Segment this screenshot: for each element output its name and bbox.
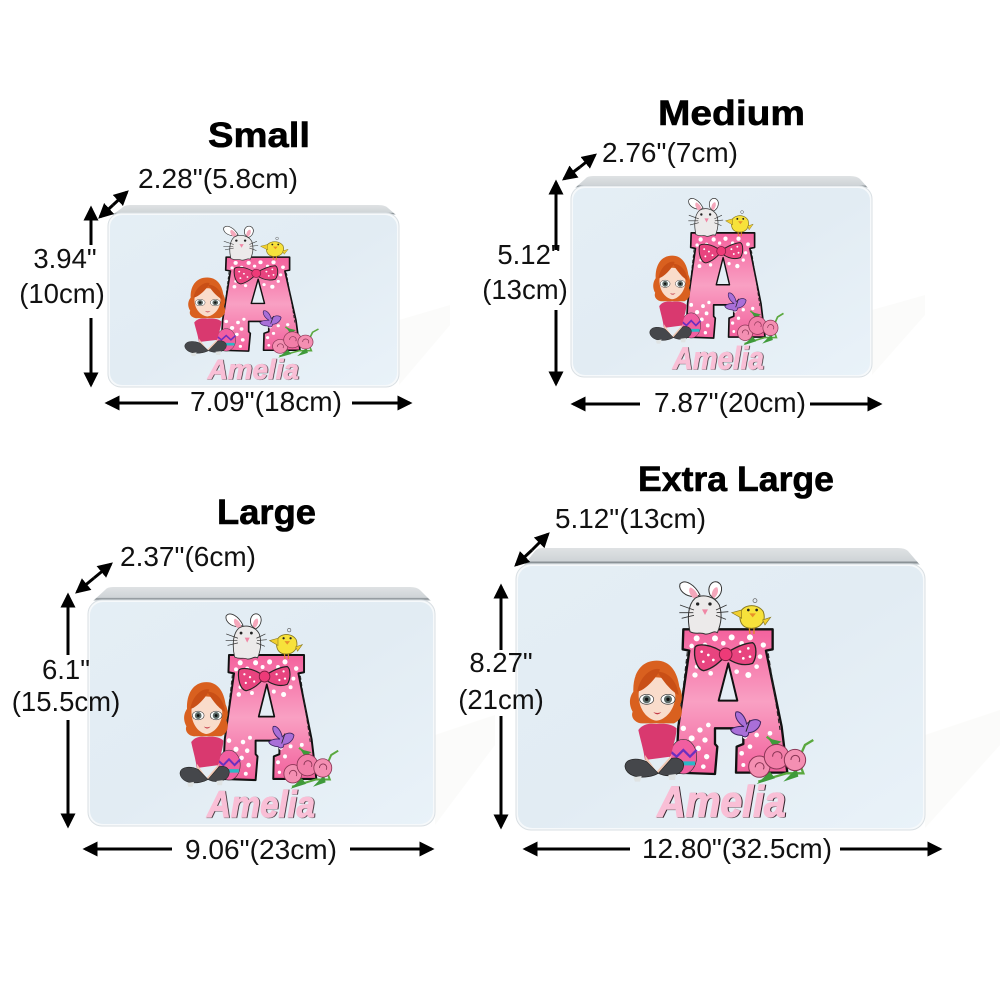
tin body: small: [108, 213, 399, 387]
shadow: medium: [872, 295, 925, 375]
height label: extra large: 8.27": [469, 647, 533, 678]
name: Amelia: Amelia: [207, 354, 299, 386]
panel: medium tin: [482, 94, 925, 418]
height label: large: (15.5cm): [12, 686, 120, 717]
illustration: small: [185, 226, 318, 386]
shadow: large: [435, 715, 495, 825]
shadow: extra large: [925, 710, 1000, 828]
height arrow: medium: [554, 182, 558, 384]
name: Amelia: Amelia: [206, 784, 315, 825]
width arrow: medium: [573, 402, 880, 406]
heading: Medium: Medium: [658, 94, 805, 133]
depth label: medium: 2.76"(7cm): [602, 137, 738, 168]
illustration: extra large: [625, 582, 813, 827]
height arrow: large: [66, 595, 70, 826]
depth arrow: small: [100, 192, 127, 217]
panel: large tin: [12, 493, 495, 865]
heading: Large: Large: [217, 493, 316, 532]
width label: extra large: 12.80"(32.5cm): [642, 833, 832, 864]
tin lid: extra large: [524, 548, 920, 565]
name: Amelia: Amelia: [656, 779, 786, 827]
depth label: extra large: 5.12"(13cm): [555, 503, 706, 534]
width label: large: 9.06"(23cm): [185, 834, 337, 865]
depth arrow: extra large: [516, 534, 548, 565]
height arrow: extra large: [500, 586, 502, 827]
width arrow: small: [107, 402, 410, 404]
height arrow: small: [90, 208, 92, 385]
illustration: medium: [650, 198, 783, 376]
width label: small: 7.09"(18cm): [190, 386, 342, 417]
panel: small tin: [19, 116, 450, 417]
width arrow: extra large: [525, 848, 940, 850]
tin body: extra large: [516, 564, 925, 830]
tin lid: small: [112, 205, 396, 215]
width arrow: large: [85, 848, 432, 850]
depth arrow: medium: [564, 155, 595, 179]
heading: Small: Small: [208, 116, 310, 155]
panel: extra large tin: [458, 460, 1000, 864]
name: Amelia: Amelia: [672, 341, 764, 376]
height label: extra large: (21cm): [458, 684, 544, 715]
shadow: small: [399, 305, 450, 385]
height label: small: (10cm): [19, 278, 105, 309]
tin lid: large: [93, 587, 431, 601]
tin body: medium: [571, 186, 872, 377]
height label: small: 3.94": [33, 243, 97, 274]
height label: medium: (13cm): [482, 274, 568, 305]
tin body: large: [88, 600, 435, 826]
illustration: large: [180, 614, 338, 825]
tin lid: medium: [575, 176, 868, 188]
height label: large: 6.1": [42, 654, 90, 685]
heading: Extra Large: Extra Large: [638, 460, 834, 499]
height label: medium: 5.12": [497, 239, 561, 270]
width label: medium: 7.87"(20cm): [654, 387, 806, 418]
depth label: small: 2.28"(5.8cm): [138, 163, 298, 194]
depth label: large: 2.37"(6cm): [120, 541, 256, 572]
depth arrow: large: [77, 564, 111, 592]
